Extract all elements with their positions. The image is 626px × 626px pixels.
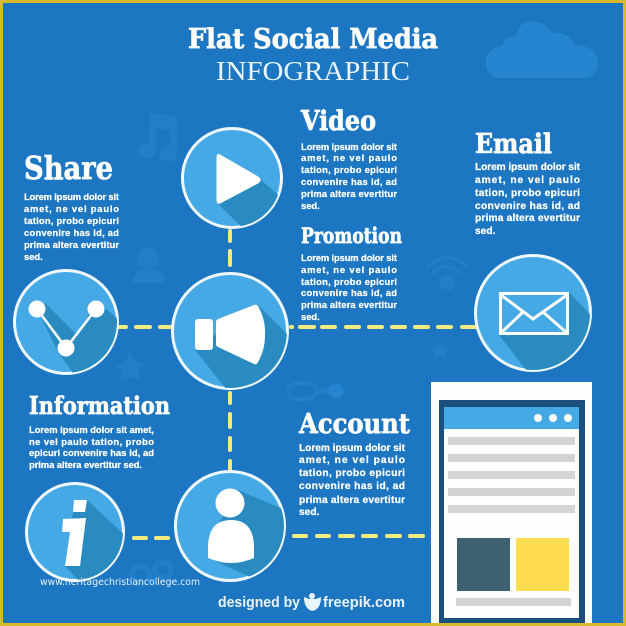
block: promotion: Promotion — [301, 223, 402, 248]
block: account: convenire has id, ad — [299, 481, 405, 492]
block: promotion: amet, ne vel paulo — [301, 264, 397, 275]
block: video: tation, probo epicuri — [301, 164, 397, 175]
icon: wifi — [426, 258, 469, 291]
block: email: Email — [475, 129, 552, 160]
block: account — [298, 409, 410, 518]
block: information: Lorem ipsum dolor sit amet, — [29, 424, 154, 435]
icon: email circle — [476, 256, 600, 375]
block: account: amet, ne vel paulo — [299, 455, 405, 466]
block: share: prima altera evertitur — [24, 239, 119, 250]
title: Flat Social Media — [188, 24, 438, 55]
block: email: prima altera evertitur — [475, 213, 580, 224]
icon: cloud — [486, 21, 598, 78]
block: video: sed. — [301, 200, 320, 211]
icon: music note — [138, 112, 177, 162]
block: promotion: prima altera evertitur — [301, 299, 397, 310]
icon: ghost star left — [115, 352, 145, 382]
icon: ghost gears — [132, 562, 171, 584]
credit: designed by freepik: designed by — [218, 595, 300, 611]
block: email: amet, ne vel paulo — [475, 175, 580, 186]
icon: video play circle — [182, 128, 290, 235]
block: share: sed. — [24, 251, 43, 262]
icon: ghost person — [132, 247, 165, 283]
block: share: convenire has id, ad — [24, 227, 119, 238]
block: information: prima altera evertitur sed. — [29, 459, 142, 470]
block: promotion — [301, 223, 402, 322]
block: account: Account — [298, 409, 410, 440]
block: information: ne vel paulo tation, probo — [29, 436, 154, 447]
block: share: Share — [24, 149, 113, 187]
block: video: Lorem ipsum dolor sit — [301, 141, 397, 152]
block: promotion: Lorem ipsum dolor sit — [301, 252, 397, 263]
icon: ghost star right — [431, 338, 449, 360]
block: share — [24, 149, 119, 262]
block: promotion: sed. — [301, 311, 320, 322]
icon: share circle — [13, 269, 119, 375]
block: information: epicuri convenire has id, ad — [29, 447, 154, 458]
icon: ghost link — [288, 383, 344, 399]
watermark: www.heritagechristiancollege.com — [40, 577, 200, 588]
document mockup — [431, 382, 592, 623]
connector dashes — [119, 231, 476, 538]
block: email: tation, probo epicuri — [475, 188, 580, 199]
block: share: amet, ne vel paulo — [24, 203, 119, 214]
block: share: tation, probo epicuri — [24, 215, 119, 226]
block: share: Lorem ipsum dolor sit — [24, 191, 119, 202]
block: video: convenire has id, ad — [301, 176, 397, 187]
block: email: Lorem ipsum dolor sit — [475, 162, 581, 173]
block: account: tation, probo epicuri — [299, 468, 405, 479]
block: email — [475, 129, 581, 237]
block: promotion: tation, probo epicuri — [301, 276, 397, 287]
icon: info circle — [26, 484, 130, 590]
block: email: sed. — [475, 226, 496, 237]
block: video — [300, 106, 397, 211]
block: video: Video — [300, 106, 376, 137]
icon: account circle — [176, 472, 290, 590]
block: account: sed. — [299, 507, 320, 518]
block: information — [29, 391, 170, 470]
block: promotion: convenire has id, ad — [301, 287, 397, 298]
block: information: Information — [29, 391, 170, 420]
block: account: prima altera evertitur — [299, 495, 405, 506]
credit: designed by freepik — [218, 593, 405, 611]
block: video: prima altera evertitur — [301, 188, 397, 199]
block: email: convenire has id, ad — [475, 201, 580, 212]
block: account: Lorem ipsum dolor sit — [299, 443, 406, 454]
title — [188, 24, 438, 86]
icon: megaphone circle — [171, 272, 289, 390]
credit: designed by freepik: freepik.com — [323, 595, 405, 611]
title: INFOGRAPHIC — [216, 56, 410, 86]
block: video: amet, ne vel paulo — [301, 152, 397, 163]
